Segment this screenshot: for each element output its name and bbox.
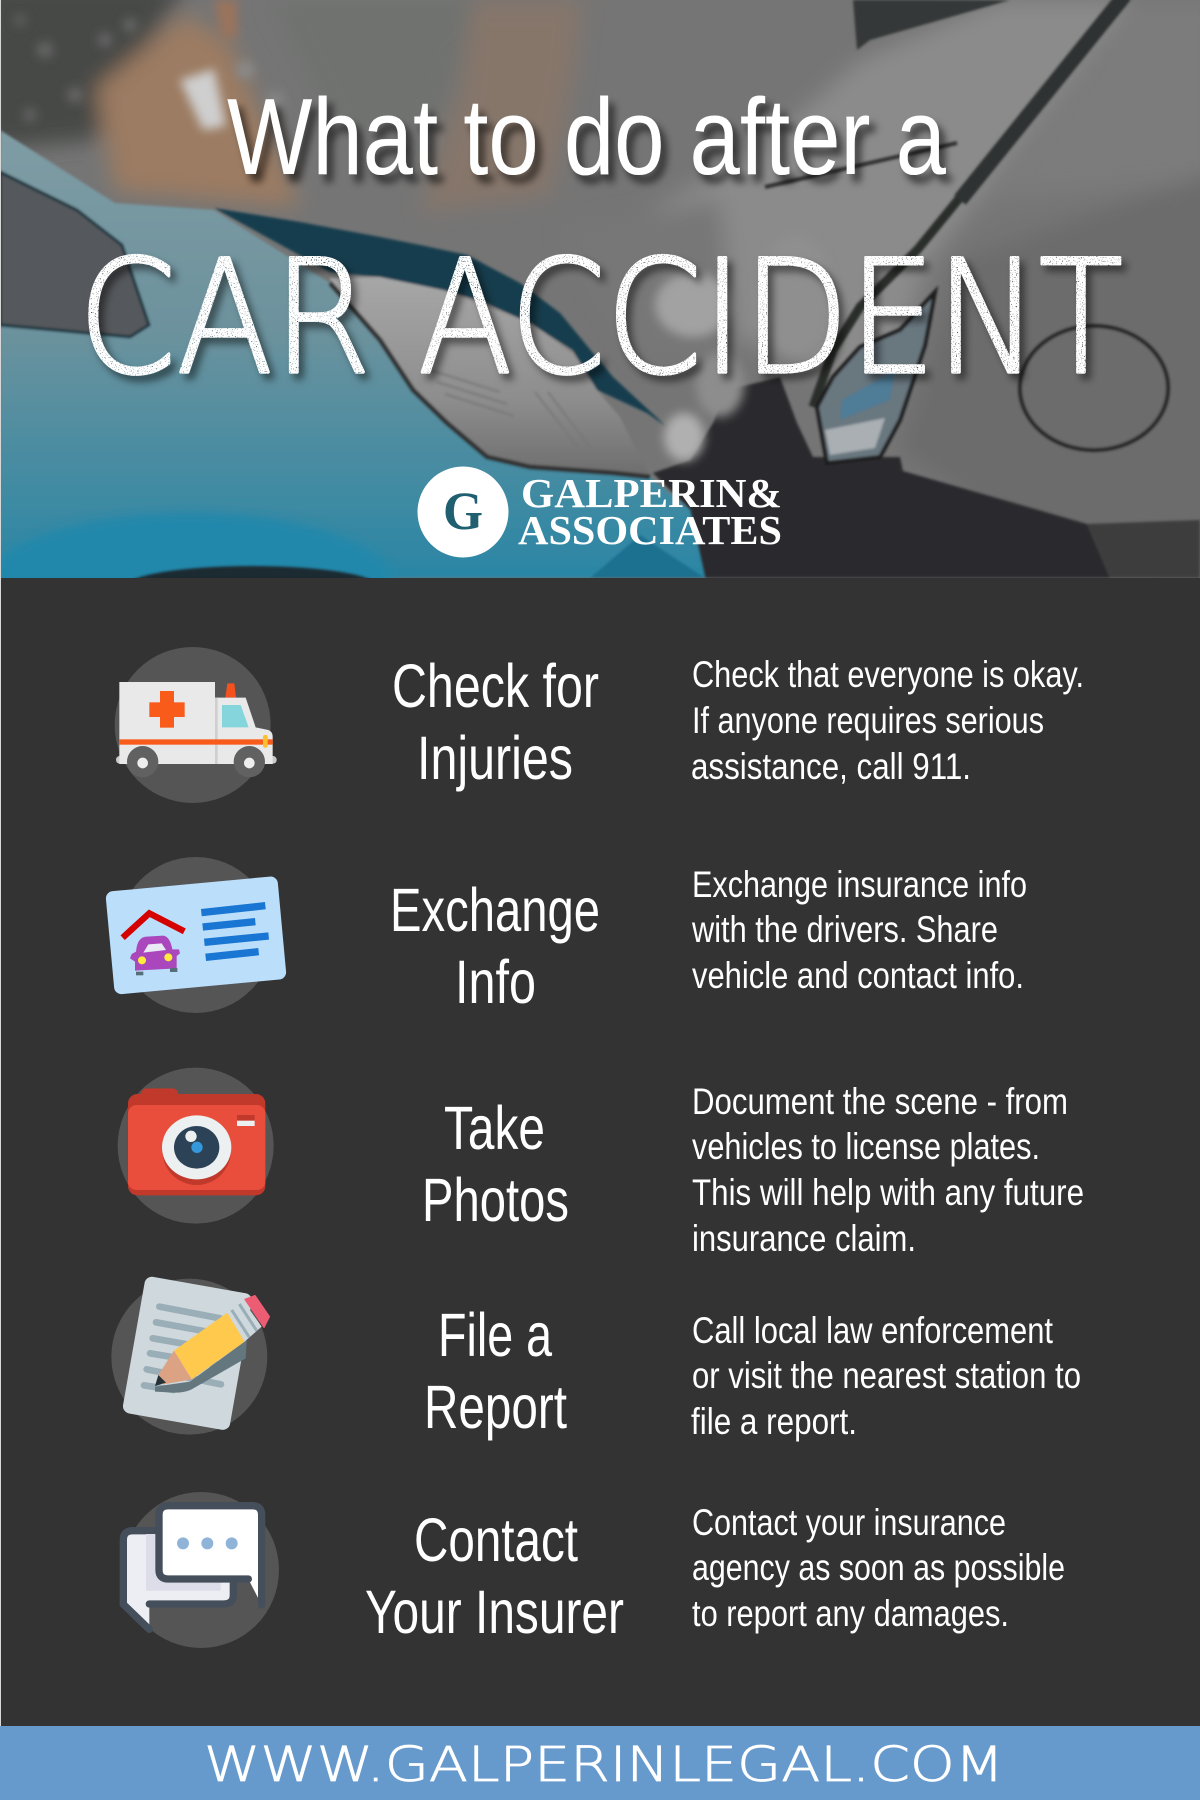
heading: File a Report: Report (424, 1373, 567, 1441)
text: check description: assistance, call 911. (691, 746, 971, 787)
text: exchange description: vehicle and contact info. (692, 955, 1024, 996)
heading: Contact Your Insurer (365, 1506, 624, 1646)
logo: Galperin and Associates: GALPERIN& (521, 470, 782, 516)
icon: chat bubbles (123, 1492, 279, 1648)
text: photos description: This will help with any future (692, 1172, 1084, 1213)
footer: website bar: WWW.GALPERINLEGAL.COM (204, 1737, 1004, 1793)
panel: step 1 check for injuries (115, 647, 1084, 803)
heading: Check for Injuries (392, 652, 599, 792)
heading: Exchange Info (390, 876, 600, 1016)
text: photos description: Document the scene - from (692, 1081, 1068, 1122)
icon: document and pencil (111, 1276, 269, 1435)
panel: step 4 file a report (111, 1276, 1081, 1442)
heading: Take Photos: Photos (422, 1166, 569, 1234)
heading: Exchange Info: Exchange (390, 876, 600, 944)
icon: insurance card (105, 857, 287, 1013)
heading: Take Photos (422, 1094, 569, 1234)
footer: website bar (0, 1726, 1200, 1800)
text: report description: file a report. (691, 1401, 857, 1442)
text: contact description: to report any damages. (692, 1593, 1009, 1634)
text: report description: Call local law enforcement (692, 1310, 1054, 1351)
text: exchange description (691, 864, 1027, 996)
text: photos description: insurance claim. (692, 1218, 916, 1259)
heading: Contact Your Insurer: Your Insurer (365, 1578, 624, 1646)
panel: step 3 take photos (118, 1068, 1084, 1259)
text: contact description: agency as soon as possible (692, 1547, 1065, 1588)
text: check description: Check that everyone is okay. (692, 654, 1084, 695)
panel: step 5 contact your insurer (123, 1492, 1065, 1648)
text: check description: If anyone requires serious (692, 700, 1044, 741)
text: check description (691, 654, 1084, 787)
heading: Check for Injuries: Injuries (417, 724, 573, 792)
text: contact description (692, 1502, 1065, 1634)
heading: Contact Your Insurer: Contact (414, 1506, 578, 1574)
logo: Galperin and Associates (418, 466, 782, 558)
logo: Galperin and Associates: G (443, 481, 483, 541)
text: report description: or visit the nearest station to (692, 1355, 1081, 1396)
title: What to do after a: What to do after a (227, 76, 946, 198)
text: report description (691, 1310, 1081, 1442)
heading: File a Report: File a (438, 1301, 552, 1369)
edge line (0, 0, 1, 1726)
heading: Check for Injuries: Check for (392, 652, 599, 720)
panel: hero crash photo (1, 0, 1200, 578)
text: photos description: vehicles to license plates. (692, 1126, 1040, 1167)
title: CAR ACCIDENT: CAR (78, 227, 371, 410)
text: exchange description: Exchange insurance info (692, 864, 1027, 905)
heading: Exchange Info: Info (455, 948, 536, 1016)
icon: camera (118, 1068, 274, 1224)
heading: File a Report (424, 1301, 567, 1441)
text: contact description: Contact your insurance (692, 1502, 1006, 1543)
title: CAR ACCIDENT: ACCIDENT (418, 227, 1123, 410)
heading: Take Photos: Take (444, 1094, 545, 1162)
title: CAR ACCIDENT (78, 227, 1123, 410)
logo: Galperin and Associates: ASSOCIATES (518, 507, 782, 553)
icon: ambulance (115, 647, 277, 803)
text: photos description (692, 1081, 1084, 1259)
text: exchange description: with the drivers. Share (691, 909, 998, 950)
panel: step 2 exchange info (105, 857, 1027, 1016)
